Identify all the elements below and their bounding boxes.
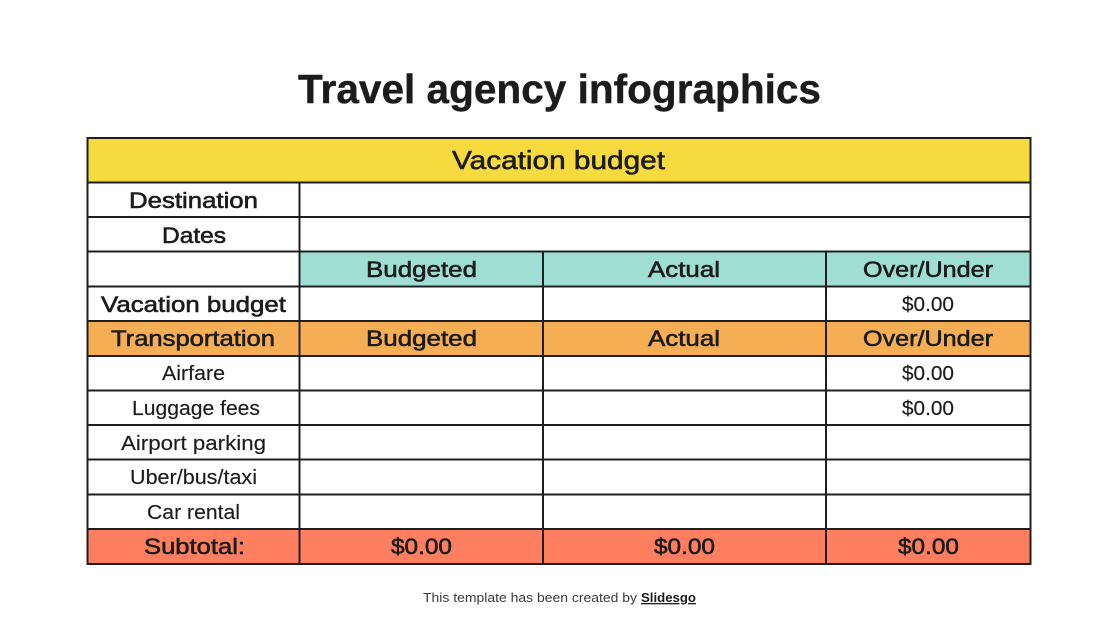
row label: uber/bus/taxi: Uber/bus/taxi	[130, 466, 257, 489]
orange transportation row	[88, 321, 1030, 356]
row label: airfare: Airfare	[162, 362, 225, 385]
subtotal row	[88, 529, 1030, 564]
footer credit: Slidesgo	[641, 590, 696, 605]
value: vacation budget over/under: $0.00	[902, 293, 954, 316]
subtotal: over/under: $0.00	[898, 534, 959, 559]
table grid lines	[87, 137, 1031, 565]
row label: car rental: Car rental	[147, 501, 240, 524]
header band: vacation budget	[88, 138, 1030, 182]
column header: actual: Actual	[648, 257, 720, 282]
row label: transportation: Transportation	[111, 326, 275, 351]
transportation column: budgeted: Budgeted	[366, 326, 477, 351]
row label: subtotal: Subtotal:	[144, 534, 245, 559]
footer credit: This template has been created by	[423, 590, 638, 605]
teal header row	[300, 252, 1030, 286]
transportation column: actual: Actual	[648, 326, 720, 351]
transportation column: over/under: Over/Under	[863, 326, 994, 351]
table heading: Vacation budget	[452, 145, 666, 175]
row label: destination: Destination	[129, 188, 258, 213]
value: airfare over/under: $0.00	[902, 362, 954, 385]
column header: over/under: Over/Under	[863, 257, 994, 282]
row label: vacation budget: Vacation budget	[101, 292, 287, 317]
value: luggage over/under: $0.00	[902, 397, 954, 420]
row label: luggage fees: Luggage fees	[132, 397, 260, 420]
subtotal: actual: $0.00	[654, 534, 715, 559]
budget table	[87, 137, 1031, 565]
row label: dates: Dates	[162, 223, 226, 248]
row label: airport parking: Airport parking	[121, 432, 266, 455]
subtotal: budgeted: $0.00	[391, 534, 452, 559]
column header: budgeted: Budgeted	[366, 257, 477, 282]
title: Travel agency infographics	[298, 66, 821, 112]
